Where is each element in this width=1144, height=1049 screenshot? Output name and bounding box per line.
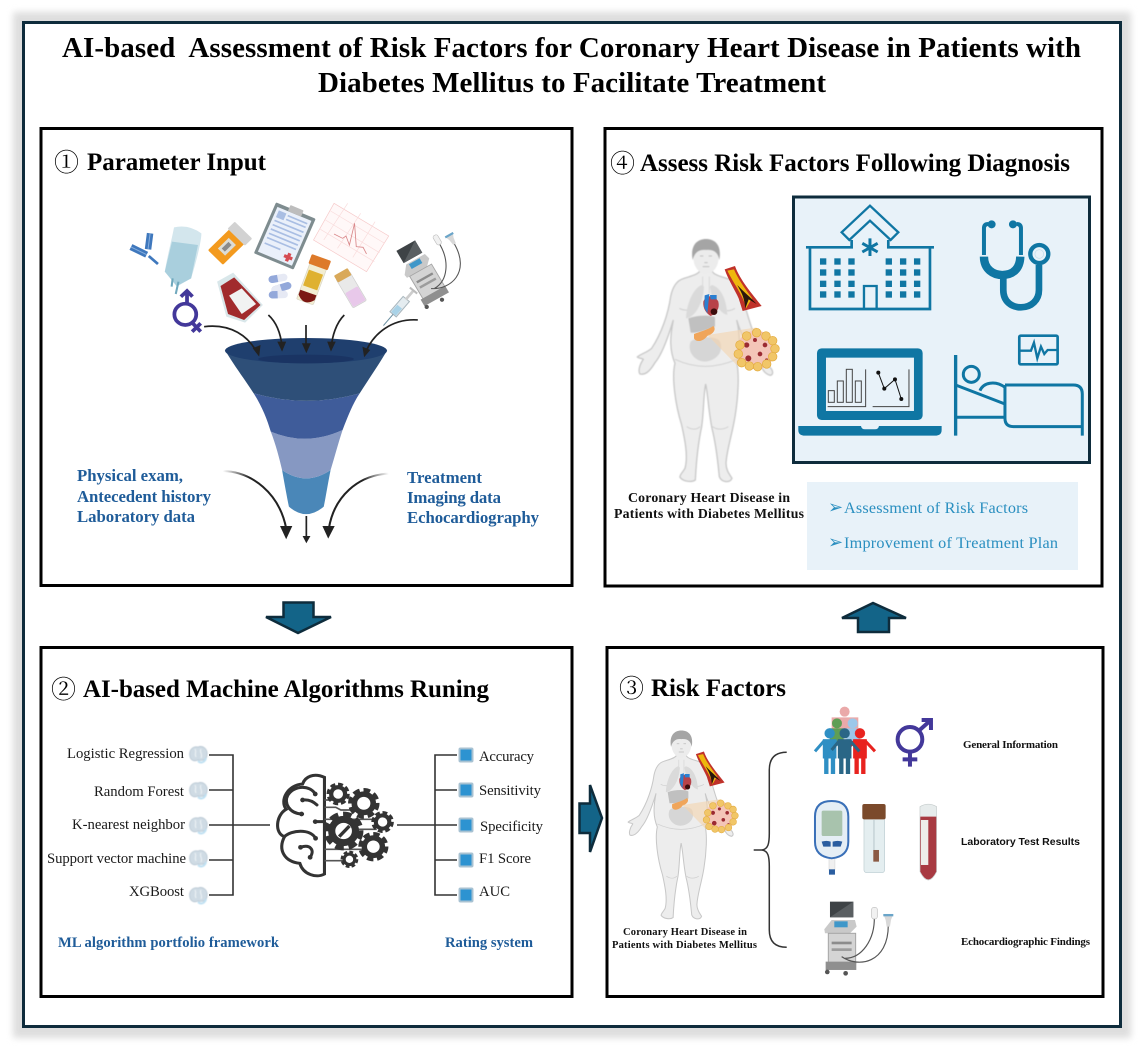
connectors: algorithms (209, 755, 270, 895)
arrow: panel 2 to panel 3 (580, 785, 602, 852)
list: algorithms: K-nearest neighbor (72, 817, 185, 833)
callout: outcomes: Improvement of Treatment Plan (844, 534, 1058, 552)
panel: risk factors (607, 648, 1103, 996)
icons: rating chips (458, 748, 474, 902)
icon: stethoscope (984, 220, 1048, 307)
caption: Coronary Heart Disease in (623, 927, 747, 938)
icon: hospital bed and monitor (956, 336, 1082, 436)
label: ML framework: ML algorithm portfolio framework (58, 935, 280, 951)
title: Diabetes Mellitus to Facilitate Treatment (318, 67, 826, 99)
patient body illustration (628, 731, 738, 919)
list: algorithms: XGBoost (129, 884, 184, 900)
caption (612, 927, 757, 951)
icon: pill bottle (207, 222, 252, 266)
brace (754, 752, 787, 947)
list: rating metrics: F1 Score (479, 851, 531, 867)
icon: sample jar (862, 804, 886, 873)
list: rating metrics: Sensitivity (479, 783, 542, 799)
heading: parameter input: Parameter Input (87, 149, 267, 176)
icon: antibody (131, 233, 158, 264)
arrows into funnel (204, 315, 418, 357)
icon: capsules (268, 273, 292, 299)
callout: outcomes: ➢ (828, 497, 843, 518)
icon: blood test tube (920, 804, 937, 880)
callout: outcomes: Assessment of Risk Factors (844, 499, 1028, 517)
heading: risk factors: Risk Factors (651, 675, 786, 702)
list: algorithms: Support vector machine (47, 851, 186, 867)
text: right input categories: Echocardiography (407, 508, 540, 527)
heading: machine algorithms: ② (51, 670, 76, 706)
icon: glucose meter (815, 801, 848, 875)
text: left input categories: Physical exam, (77, 466, 183, 485)
icon: laptop with charts (798, 348, 942, 436)
icon: ultrasound machine (824, 902, 893, 976)
icon: hospital (806, 206, 934, 309)
medical icons (131, 200, 481, 332)
panel: machine algorithms (41, 648, 572, 996)
list: rating metrics: Accuracy (479, 749, 535, 765)
heading: assess risk factors: ④ (610, 144, 635, 180)
icon: IV bag (165, 226, 201, 294)
icon: ultrasound machine (392, 222, 481, 311)
text: left input categories: Laboratory data (77, 507, 196, 526)
label: laboratory results: Laboratory Test Results (961, 836, 1080, 848)
panel: parameter input (41, 128, 572, 586)
title: AI-based Assessment of Risk Factors for Coronary Heart Disease in Patients with (62, 32, 1081, 64)
icon: gender symbol (174, 291, 201, 332)
label: rating system: Rating system (445, 935, 533, 951)
caption: Coronary Heart Disease in (628, 490, 790, 505)
icon panel (794, 197, 1090, 462)
title (62, 32, 1081, 99)
heading: risk factors (619, 669, 786, 705)
arrow: panel 1 to panel 2 (266, 602, 331, 633)
list: algorithms: Random Forest (94, 784, 184, 800)
list: rating metrics (479, 749, 544, 900)
text: left input categories: Antecedent history (77, 487, 212, 506)
text: right input categories: Imaging data (407, 488, 502, 507)
callout: outcomes (807, 482, 1078, 570)
icon: vial (334, 268, 367, 308)
icon: syringe (380, 287, 418, 329)
text: right input categories (407, 468, 540, 527)
caption: Patients with Diabetes Mellitus (614, 506, 805, 521)
arrow: panel 3 to panel 4 (842, 603, 906, 632)
heading: machine algorithms (51, 670, 490, 706)
icon: AI brain with gears (278, 775, 392, 876)
caption: Patients with Diabetes Mellitus (612, 940, 757, 951)
heading: parameter input: ① (54, 143, 79, 179)
heading: assess risk factors: Assess Risk Factors Following Diagnosis (640, 150, 1070, 177)
patient body illustration (637, 239, 779, 482)
funnel (223, 338, 389, 543)
list: algorithms (47, 746, 186, 900)
arrows out of funnel (223, 471, 389, 543)
panel: assess risk factors (605, 128, 1102, 586)
label: echocardiographic findings: Echocardiographic Findings (961, 936, 1091, 948)
heading: machine algorithms: AI-based Machine Algorithms Runing (83, 676, 490, 703)
icon: blood bag (217, 273, 263, 323)
label: general information: General Information (963, 739, 1058, 751)
heading: risk factors: ③ (619, 669, 644, 705)
callout: outcomes: ➢ (828, 532, 843, 553)
icon: blood collection tube (295, 254, 331, 305)
list: rating metrics: AUC (479, 884, 510, 900)
connectors: rating (397, 755, 457, 895)
list: rating metrics: Specificity (480, 819, 544, 835)
list: algorithms: Logistic Regression (67, 746, 185, 762)
caption (614, 490, 805, 521)
icons: algorithm brains (190, 746, 207, 903)
text: left input categories (77, 466, 212, 526)
icon: ECG paper (314, 203, 389, 272)
icon: gender symbol (898, 720, 931, 767)
icon: clipboard (254, 200, 317, 270)
heading: parameter input (54, 143, 267, 179)
text: right input categories: Treatment (407, 468, 482, 487)
icon: people group (815, 707, 875, 774)
